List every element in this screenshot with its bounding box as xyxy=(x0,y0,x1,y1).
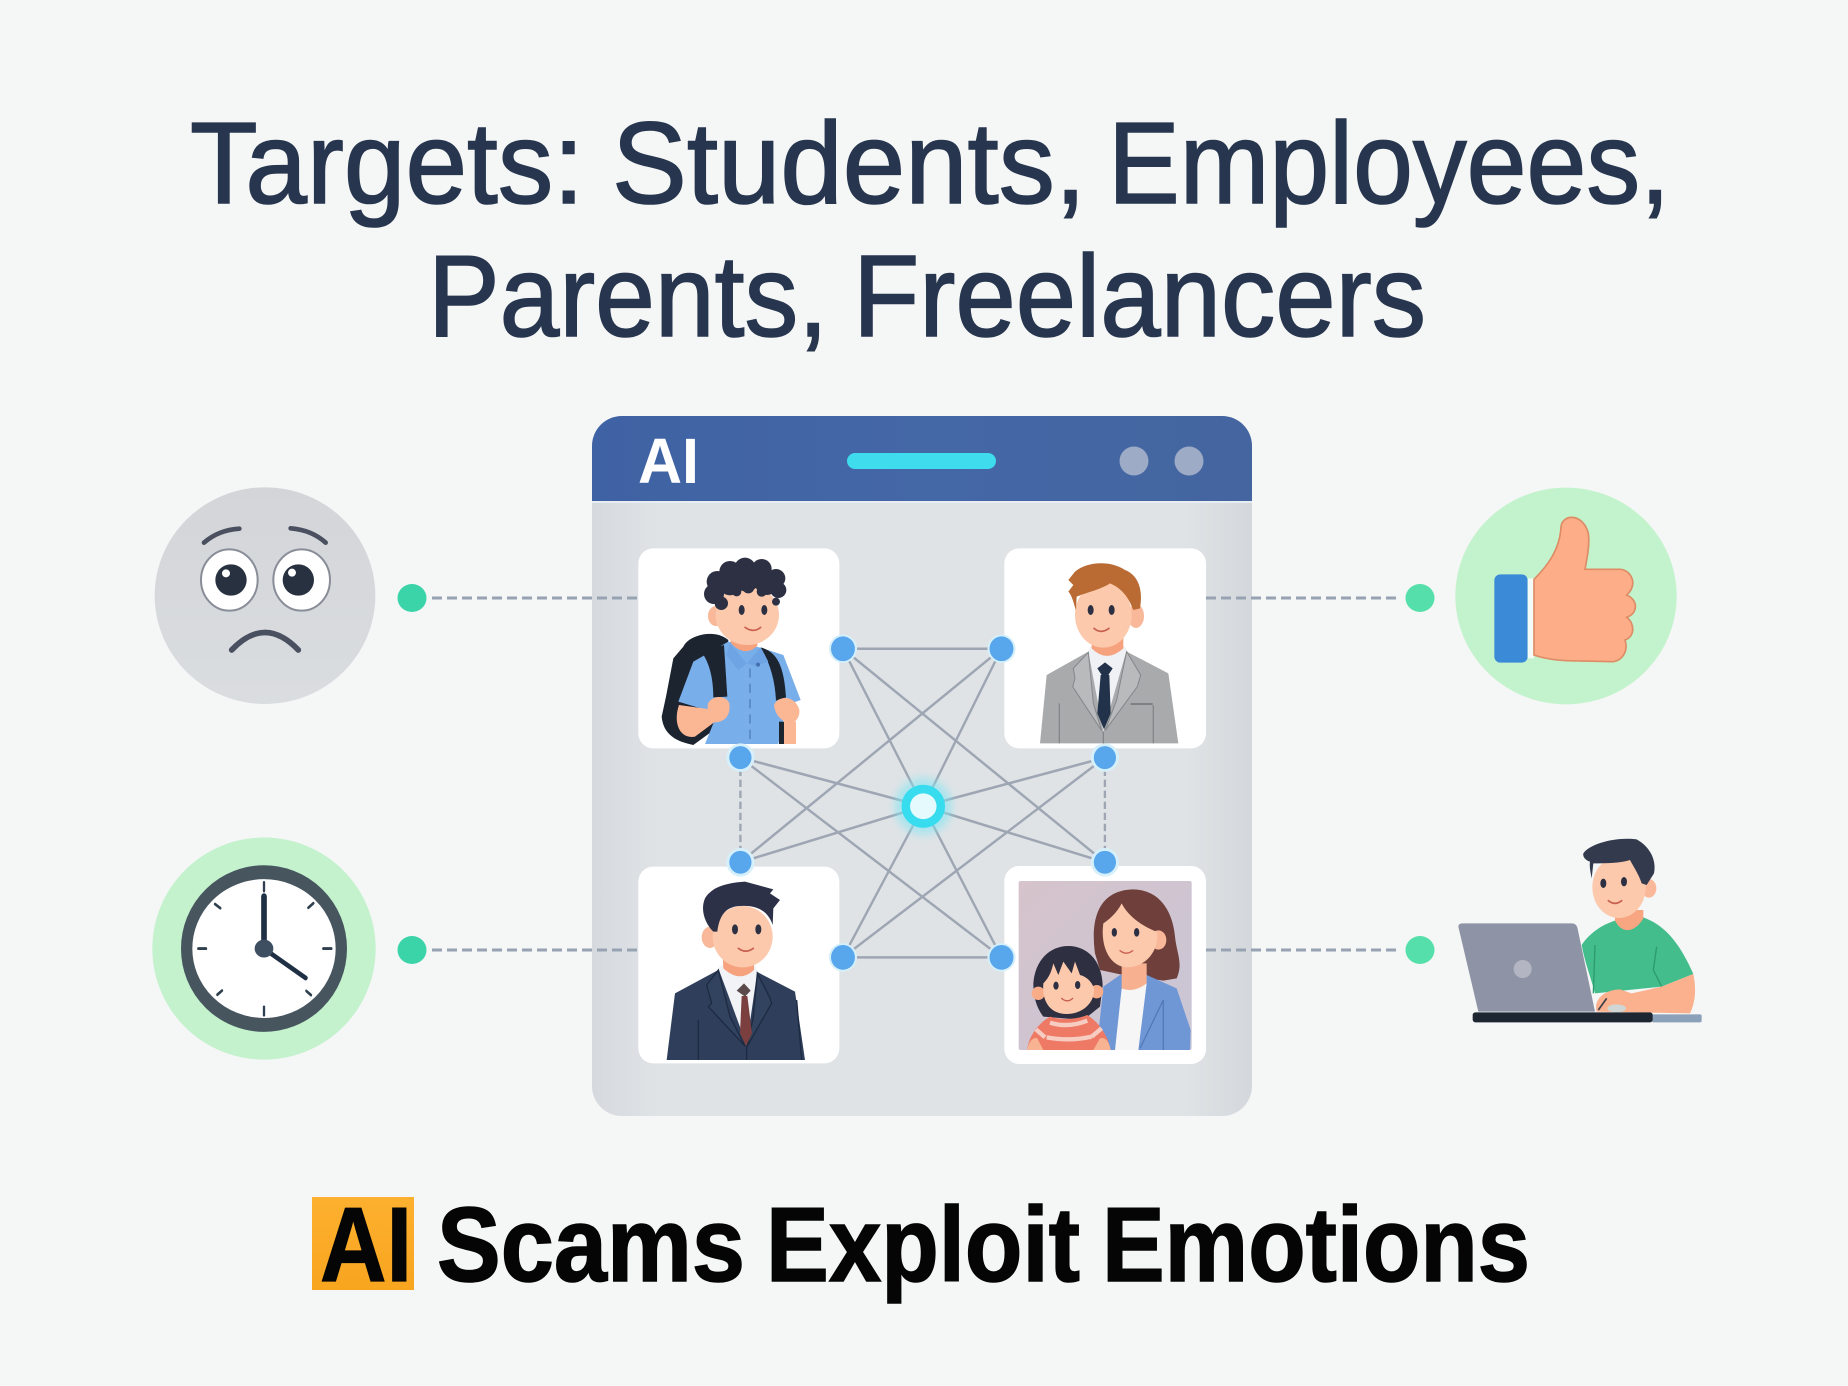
headline text: Emotions xyxy=(1102,1186,1530,1304)
connector: right top xyxy=(1206,584,1434,612)
title: Targets: xyxy=(190,98,584,228)
icon: clock xyxy=(152,838,376,1060)
connector: left top xyxy=(398,584,640,612)
icon: thumbs up xyxy=(1455,488,1677,704)
connector: left bottom xyxy=(398,936,640,964)
window header bar xyxy=(592,416,1252,502)
title xyxy=(190,98,1670,361)
network lines xyxy=(740,649,1105,957)
headline text: Exploit xyxy=(766,1186,1080,1304)
headline text: Scams xyxy=(437,1186,745,1304)
card: parent and child photo xyxy=(1004,866,1206,1064)
window body xyxy=(592,416,1252,1116)
AI badge: AI xyxy=(320,1186,412,1304)
panel: AI window xyxy=(592,416,1252,1116)
card: employee in gray suit xyxy=(1004,548,1206,748)
title: Parents, xyxy=(428,231,828,361)
header label AI: AI xyxy=(638,425,699,497)
connector: right bottom xyxy=(1206,936,1434,964)
cyan status bar xyxy=(847,453,996,469)
card: employee in dark suit xyxy=(638,867,839,1063)
headline text xyxy=(437,1186,1530,1304)
network nodes xyxy=(726,635,1119,972)
icon: worried face xyxy=(155,487,375,704)
title: Employees, xyxy=(1108,98,1670,228)
window buttons xyxy=(1120,446,1204,476)
title: Freelancers xyxy=(853,231,1426,361)
icon: freelancer at laptop xyxy=(1458,839,1702,1022)
bottom headline xyxy=(312,1186,1530,1304)
title: Students, xyxy=(612,98,1086,228)
card: student xyxy=(638,548,839,748)
central AI hub node xyxy=(894,778,952,835)
